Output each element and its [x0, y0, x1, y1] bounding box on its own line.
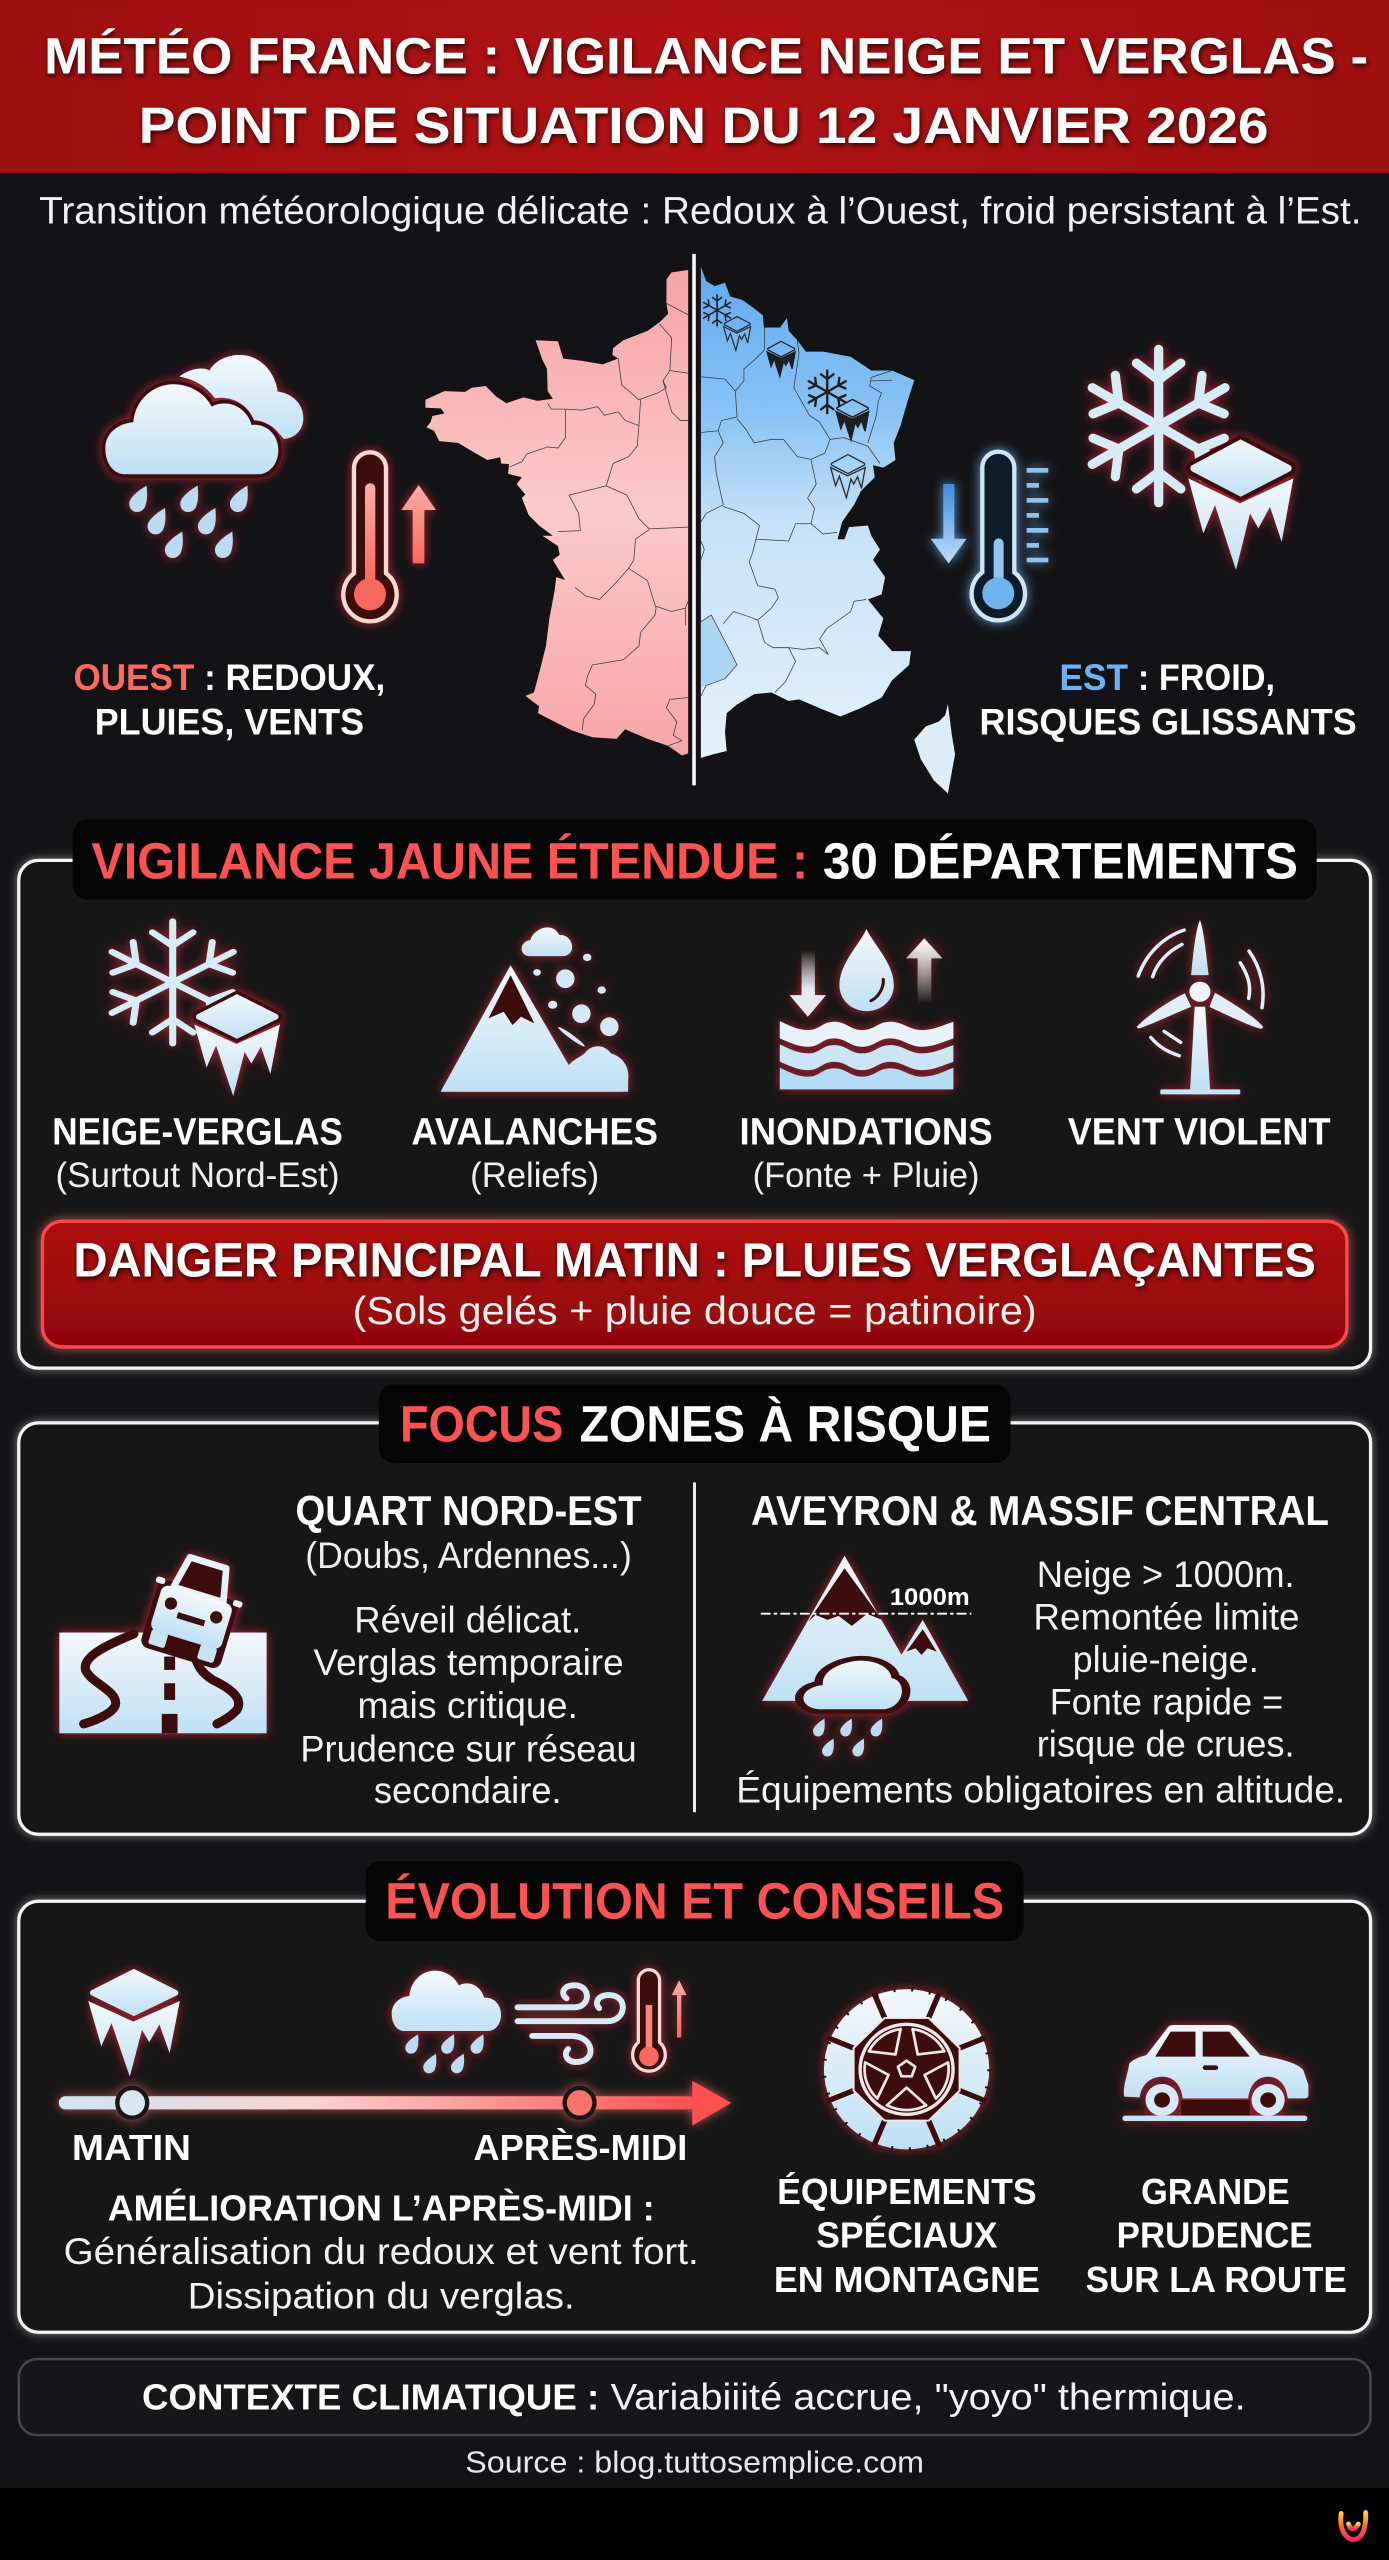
text: quart nord-est: Verglas temporaire: [313, 1642, 624, 1683]
label: inondations: INONDATIONS: [740, 1110, 993, 1153]
heading: evolution: ÉVOLUTION ET CONSEILS: [385, 1871, 1004, 1929]
text: aveyron body: Équipements obligatoires en altitude.: [736, 1769, 1345, 1810]
icon: snow and ice: [102, 921, 280, 1096]
text: aveyron body: [736, 1554, 1345, 1810]
label: prudence: SUR LA ROUTE: [1086, 2259, 1347, 2300]
panel: evolution et conseils: [19, 1861, 1371, 2332]
map hazard icons: [701, 295, 869, 498]
title banner: [0, 0, 1389, 173]
label: ouest: : REDOUX,: [204, 657, 385, 698]
text: quart nord-est: secondaire.: [374, 1770, 562, 1811]
label: equipements: SPÉCIAUX: [816, 2214, 998, 2255]
text: quart nord-est: [295, 1487, 642, 1811]
text: quart nord-est: Réveil délicat.: [354, 1600, 581, 1641]
text: aveyron body: risque de crues.: [1037, 1724, 1295, 1765]
panel: focus zones: [19, 1384, 1371, 1834]
heading: evolution: [366, 1861, 1024, 1941]
label: neige-verglas: (Surtout Nord-Est): [56, 1156, 340, 1195]
heading: focus zones: FOCUS: [400, 1395, 563, 1453]
label: inondations: [740, 1110, 993, 1195]
callout: danger principal: (Sols gelés + pluie douce = patinoire): [353, 1290, 1037, 1333]
logo: [1341, 2513, 1366, 2540]
map west half: [425, 270, 688, 755]
label: vent violent: VENT VIOLENT: [1068, 1110, 1331, 1153]
map divider line: [692, 254, 696, 785]
label: est: [980, 657, 1357, 743]
map of France split west/east: [425, 254, 955, 793]
text: aveyron heading: AVEYRON & MASSIF CENTRAL: [751, 1487, 1329, 1534]
icon: small thermometer: [633, 1970, 687, 2071]
text: aveyron body: Remontée limite: [1033, 1596, 1300, 1637]
icon: rain clouds: [105, 355, 303, 558]
icon: ice: [88, 1969, 180, 2076]
label: ouest: [73, 657, 385, 743]
source: Source : blog.tuttosemplice.com: [465, 2447, 924, 2480]
label: est: EST: [1060, 657, 1129, 698]
text: quart nord-est: Prudence sur réseau: [300, 1729, 637, 1770]
panel: vigilance jaune: [19, 820, 1371, 1368]
label: est: : FROID,: [1138, 657, 1275, 698]
label: matin: MATIN: [72, 2127, 191, 2168]
text: quart nord-est: (Doubs, Ardennes...): [305, 1535, 632, 1576]
text: amelioration: Dissipation du verglas.: [188, 2276, 575, 2317]
panel: contexte climatique: CONTEXTE CLIMATIQUE :: [142, 2377, 599, 2418]
icon: avalanche: [441, 927, 628, 1092]
text: quart nord-est: mais critique.: [358, 1685, 578, 1726]
label: est: RISQUES GLISSANTS: [980, 702, 1357, 743]
icon: mountains with rain and snow line: 1000m: [890, 1585, 970, 1611]
panel: contexte climatique: Variabiiité accrue, "yoyo" thermique.: [611, 2377, 1246, 2418]
label: avalanches: AVALANCHES: [411, 1110, 658, 1153]
text: amelioration: AMÉLIORATION L’APRÈS-MIDI :: [108, 2187, 655, 2228]
bottom black band: [0, 2488, 1389, 2560]
label: ouest: PLUIES, VENTS: [95, 702, 364, 743]
text: aveyron body: Fonte rapide =: [1050, 1681, 1283, 1722]
subtitle: Transition météorologique délicate : Redoux à l’Ouest, froid persistant à l’Est.: [39, 190, 1362, 232]
label: prudence: PRUDENCE: [1117, 2214, 1313, 2255]
title text: POINT DE SITUATION DU 12 JANVIER 2026: [139, 96, 1269, 154]
callout: danger principal: [42, 1221, 1347, 1347]
timeline arrow: [59, 2081, 731, 2126]
icon: flood: [780, 929, 953, 1089]
label: avalanches: (Reliefs): [470, 1156, 599, 1195]
icon: tire with chains: [824, 1989, 989, 2149]
label: prudence: GRANDE: [1141, 2171, 1290, 2212]
map corsica: [914, 704, 955, 793]
map east half: [701, 267, 914, 758]
icon: wind turbine: [1137, 920, 1263, 1094]
label: apres-midi: APRÈS-MIDI: [473, 2127, 687, 2168]
text: amelioration: Généralisation du redoux et vent fort.: [64, 2231, 699, 2272]
icon: cloud with rain: [392, 1971, 501, 2073]
heading: vigilance jaune: 30 DÉPARTEMENTS: [823, 831, 1298, 889]
panel: contexte climatique: [19, 2359, 1371, 2435]
icon: thermometer falling: [931, 452, 1048, 620]
label: equipements: EN MONTAGNE: [774, 2259, 1040, 2300]
label: equipements: [774, 2171, 1040, 2300]
label: avalanches: [411, 1110, 658, 1195]
text: amelioration: [64, 2187, 699, 2317]
icon: sliding car on road: [59, 1550, 267, 1733]
icon: thermometer rising: [343, 452, 436, 621]
text: aveyron body: pluie-neige.: [1073, 1639, 1259, 1680]
text: aveyron body: Neige > 1000m.: [1037, 1554, 1295, 1595]
callout: danger principal: DANGER PRINCIPAL MATIN : PLUIES VERGLAÇANTES: [73, 1234, 1316, 1288]
icon: snowflake and ice: [1081, 349, 1293, 570]
text: quart nord-est: QUART NORD-EST: [295, 1487, 642, 1534]
heading: vigilance jaune: [73, 820, 1317, 900]
label: ouest: OUEST: [73, 657, 195, 698]
icon: car: [1122, 2025, 1308, 2121]
label: prudence: [1086, 2171, 1347, 2300]
label: equipements: ÉQUIPEMENTS: [777, 2171, 1037, 2212]
title text: [44, 27, 1368, 154]
label: neige-verglas: [52, 1110, 343, 1195]
heading: focus zones: [379, 1384, 1011, 1463]
heading: vigilance jaune: VIGILANCE JAUNE ÉTENDUE :: [91, 831, 808, 889]
heading: focus zones: ZONES À RISQUE: [580, 1395, 991, 1453]
icon: wind: [518, 1985, 623, 2062]
icon: mountains with rain and snow line: [761, 1556, 971, 1756]
label: inondations: (Fonte + Pluie): [753, 1156, 980, 1195]
label: neige-verglas: NEIGE-VERGLAS: [52, 1110, 343, 1153]
title text: MÉTÉO FRANCE : VIGILANCE NEIGE ET VERGLAS -: [44, 27, 1368, 85]
